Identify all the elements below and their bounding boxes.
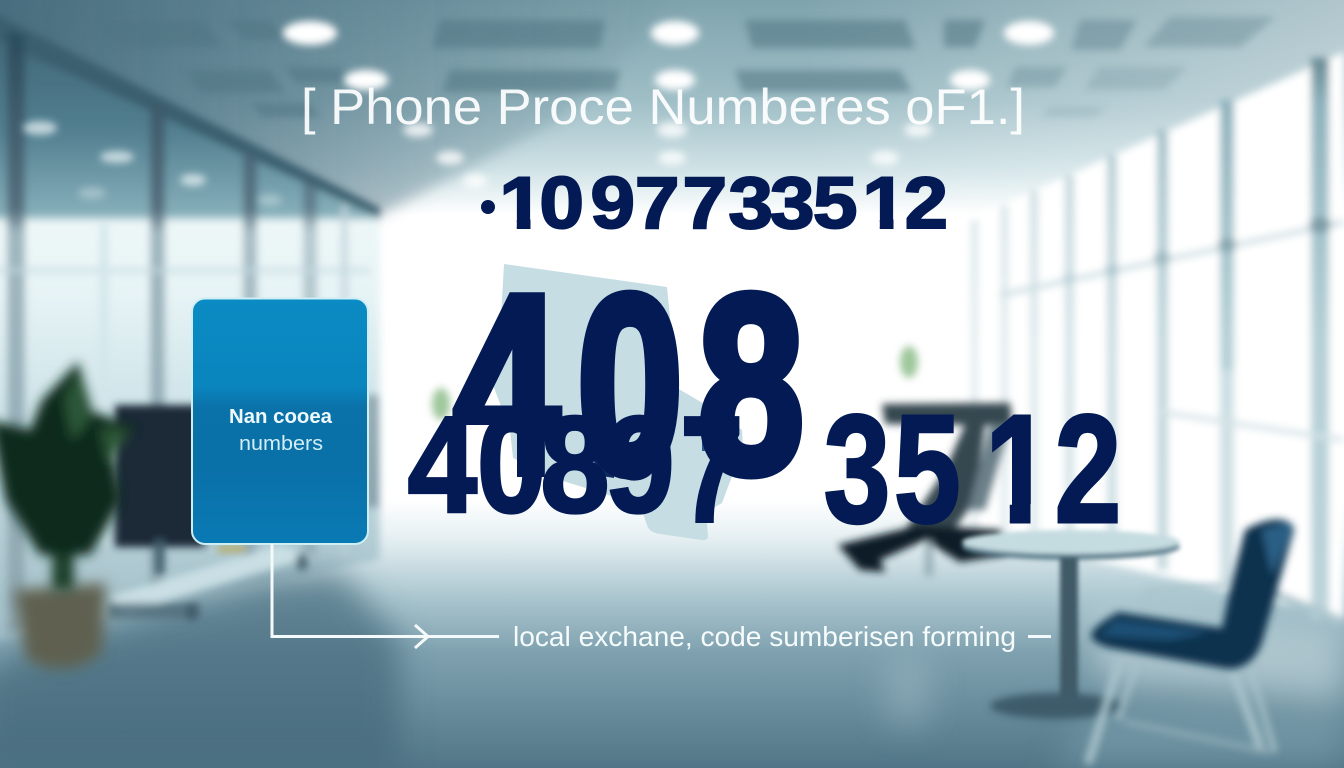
floor tones	[0, 572, 1344, 768]
distant green plants	[432, 346, 918, 420]
monitor and desk	[108, 405, 312, 621]
ceiling lights	[283, 21, 1054, 188]
caption dash	[1028, 635, 1051, 638]
map silhouette	[490, 264, 743, 540]
phone number line: ·	[481, 184, 495, 228]
round table	[962, 530, 1180, 719]
phone number line	[481, 176, 946, 230]
caption: local exchane, code sumberisen forming	[513, 621, 1016, 652]
map darker overlap	[592, 429, 717, 478]
digits 3512: 3512	[824, 384, 1121, 555]
dark mid-ground chair	[838, 403, 1012, 576]
arrow: card to caption	[272, 544, 499, 648]
blue chair	[1088, 520, 1294, 764]
panel: blue card	[192, 298, 368, 544]
title: [ Phone Proce Numberes oF1.]	[301, 79, 1025, 135]
blurred dark strip right of card	[366, 395, 378, 507]
right windows	[965, 52, 1344, 622]
card subtext: numbers	[239, 433, 323, 455]
left windows	[0, 6, 380, 644]
phone number line: 1097733512	[499, 163, 948, 244]
window reflections of lights	[23, 121, 282, 206]
plant and pot	[0, 362, 138, 668]
large area code: 408	[453, 242, 804, 526]
digit 7: 7	[680, 386, 743, 554]
card heading: Nan cooea	[229, 406, 333, 428]
digits 4089: 4089	[408, 387, 675, 541]
ceiling panels	[95, 17, 1275, 117]
